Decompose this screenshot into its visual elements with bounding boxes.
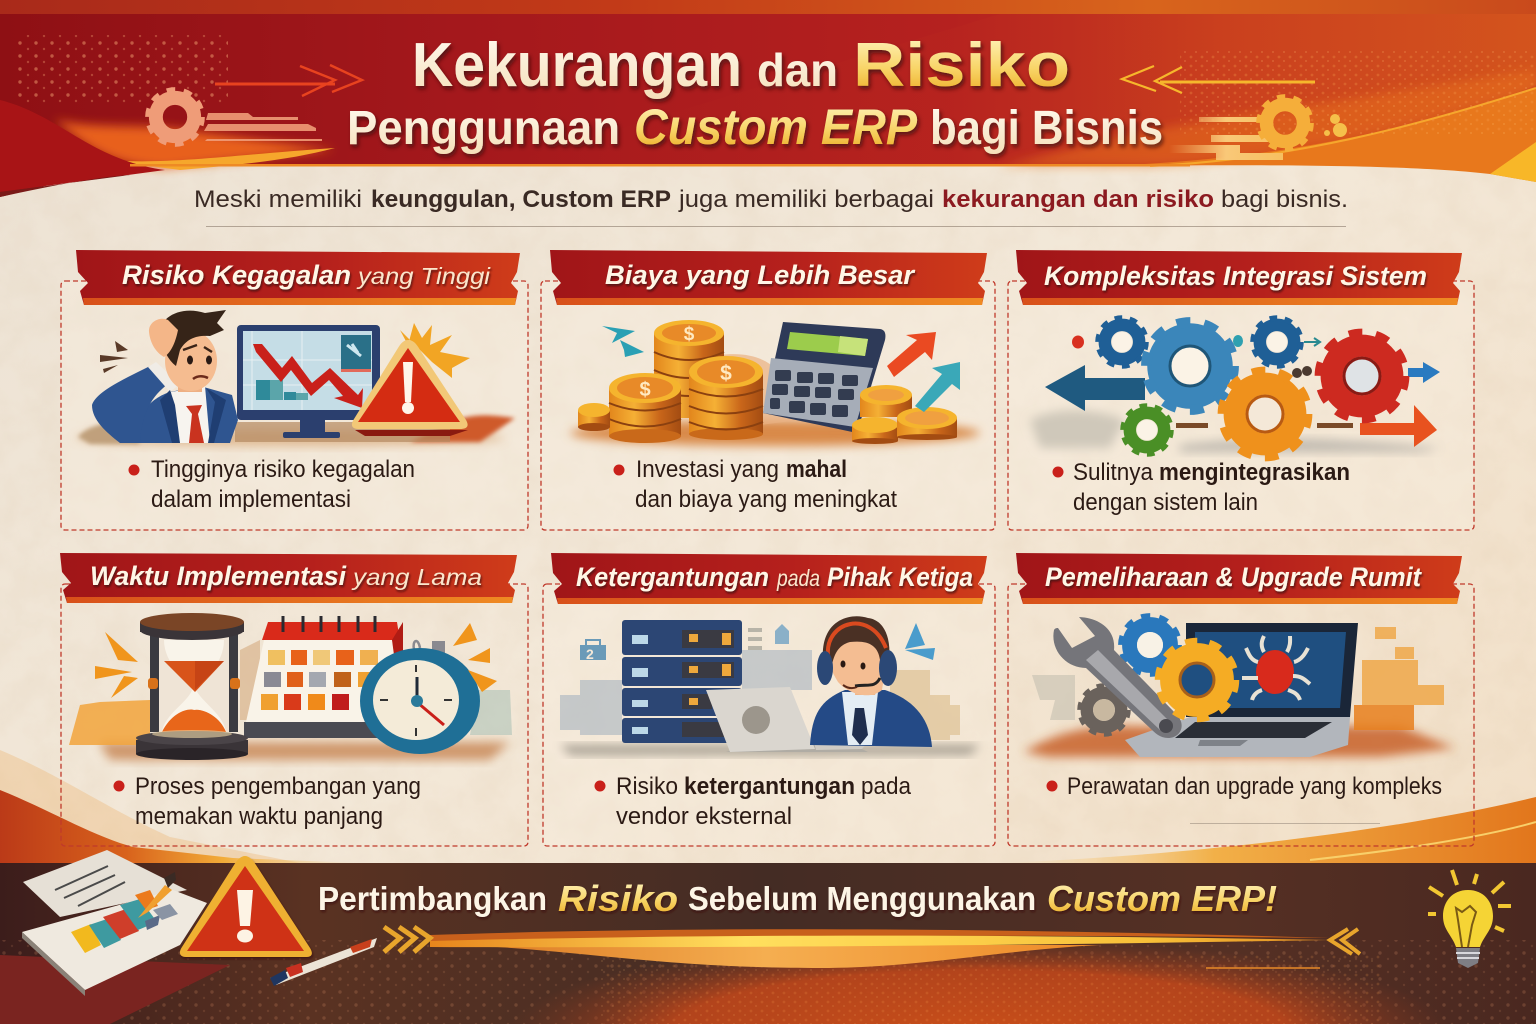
back stack: $	[684, 324, 695, 345]
footer call to action	[318, 878, 1277, 919]
title: dan	[757, 44, 838, 96]
arrow: footer left chevrons	[384, 927, 430, 952]
illustration: stressed man, falling chart, warning	[75, 310, 515, 446]
arrow: top right chevrons	[1122, 66, 1315, 93]
footer banner	[0, 863, 1536, 1024]
footer call to action: Risiko	[558, 878, 678, 919]
bullet text	[128, 456, 415, 513]
intro text: bagi bisnis.	[1221, 186, 1348, 213]
ribbon heading: pada	[776, 565, 820, 591]
ribbon heading	[550, 250, 987, 305]
intro text: Meski memiliki	[194, 186, 362, 213]
panel: pemeliharaan	[1008, 553, 1474, 846]
icon: footer warning triangle	[180, 856, 312, 957]
bullet text: ketergantungan	[684, 773, 855, 800]
icon: documents with chart	[22, 850, 207, 996]
bullet text	[1052, 459, 1350, 516]
server rack	[622, 620, 742, 743]
bullet text: Tingginya risiko kegagalan	[151, 456, 415, 483]
bullet text: vendor eksternal	[616, 803, 792, 830]
arrow: footer right chevrons	[1330, 929, 1360, 954]
ribbon heading	[1016, 250, 1462, 305]
illustration: servers, laptop, support agent: 2	[586, 646, 594, 662]
bullet text	[594, 773, 912, 830]
ribbon heading: Pemeliharaan & Upgrade Rumit	[1045, 562, 1422, 592]
bullet text: Risiko	[616, 773, 678, 800]
icon: light bulb	[1428, 870, 1511, 968]
bullet text: Sulitnya	[1073, 459, 1154, 486]
bullet text: Perawatan dan upgrade yang kompleks	[1067, 773, 1442, 800]
icon: gear right with speed lines	[1169, 97, 1347, 160]
rising arrows	[887, 332, 936, 377]
bullet text: dengan sistem lain	[1073, 489, 1258, 516]
bullet text: memakan waktu panjang	[135, 803, 383, 830]
intro text: keunggulan, Custom ERP	[371, 186, 671, 213]
illustration: wrench, gears, laptop with bug	[1024, 616, 1455, 757]
support agent	[810, 616, 932, 747]
title: Penggunaan	[347, 102, 620, 155]
footer call to action: Pertimbangkan	[318, 880, 547, 917]
bullet text: pada	[861, 773, 912, 800]
panel: biaya	[541, 250, 995, 530]
illustration: hourglass, calendar, stopwatch	[69, 613, 512, 760]
footer call to action: Sebelum Menggunakan	[688, 880, 1036, 917]
panel: waktu implementasi	[60, 553, 528, 846]
yellow gear	[1159, 642, 1235, 718]
title: bagi Bisnis	[930, 102, 1163, 155]
footer call to action: Custom ERP!	[1047, 878, 1277, 919]
title: Kekurangan	[412, 31, 742, 100]
ribbon heading: Biaya yang Lebih Besar	[605, 260, 916, 290]
bullet text: mengintegrasikan	[1159, 459, 1350, 486]
bullet text: dalam implementasi	[151, 486, 351, 513]
ribbon heading: Waktu Implementasi	[90, 561, 346, 591]
title: Risiko	[853, 31, 1070, 100]
panel: kompleksitas	[1008, 250, 1474, 530]
panel: ketergantungan	[543, 553, 995, 846]
illustration: coins and calculator	[570, 320, 980, 446]
ribbon heading: Risiko Kegagalan	[122, 260, 351, 290]
hourglass	[136, 613, 248, 760]
left stack: $	[639, 379, 651, 401]
bug	[1242, 636, 1310, 700]
icon: gear left with speed lines	[148, 90, 322, 144]
monitor	[237, 325, 380, 438]
back stack	[654, 320, 724, 418]
title: Custom ERP	[634, 99, 918, 155]
bullet text: Investasi yang	[636, 456, 779, 483]
ribbon heading	[76, 250, 520, 305]
ribbon heading: Pihak Ketiga	[827, 562, 973, 592]
arrow: top left chevrons	[215, 65, 362, 96]
bullet text	[1046, 773, 1442, 824]
wrench	[1053, 617, 1182, 738]
bullet text	[614, 456, 897, 513]
header banner	[0, 0, 1536, 197]
ribbon heading	[60, 553, 517, 603]
burst	[400, 323, 470, 378]
rays	[95, 623, 497, 698]
laptop	[706, 687, 868, 752]
intro text: kekurangan dan risiko	[942, 186, 1214, 213]
bullet text: dan biaya yang meningkat	[635, 486, 897, 513]
ribbon heading: yang Tinggi	[356, 263, 491, 289]
icon: pen	[270, 938, 377, 986]
loose coins	[578, 385, 957, 444]
warning triangle	[352, 340, 468, 436]
stopwatch	[360, 641, 480, 754]
ribbon heading: yang Lama	[351, 564, 482, 590]
intro text	[194, 186, 1348, 227]
man	[92, 310, 238, 443]
ribbon heading	[1016, 553, 1462, 604]
panel: risiko kegagalan	[61, 250, 528, 530]
intro text: juga memiliki berbagai	[678, 186, 934, 213]
ribbon heading: Ketergantungan	[576, 562, 769, 592]
footer wash above band	[0, 750, 1536, 863]
illustration: gears and arrows	[1030, 318, 1440, 456]
bullet text: mahal	[786, 456, 847, 483]
bullet text	[114, 773, 421, 830]
title	[347, 31, 1163, 155]
ribbon heading: Kompleksitas Integrasi Sistem	[1044, 261, 1427, 291]
front stack	[689, 356, 763, 440]
illustration: servers, laptop, support agent	[560, 616, 980, 755]
calculator	[763, 322, 885, 433]
ribbon heading	[551, 553, 987, 604]
laptop	[1125, 623, 1358, 757]
bullet text: Proses pengembangan yang	[135, 773, 421, 800]
front stack: $	[720, 362, 732, 385]
calendar	[244, 616, 403, 738]
left stack	[609, 373, 681, 443]
blue gear	[1121, 616, 1179, 674]
